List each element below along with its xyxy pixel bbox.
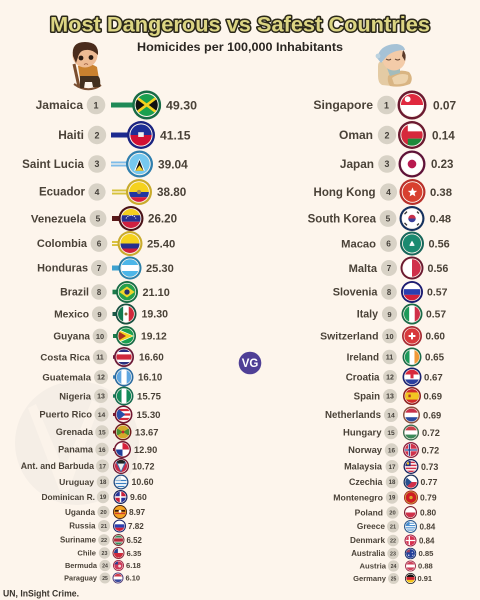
row: Suriname: 6.52 — [126, 536, 142, 545]
row: Montenegro — [333, 490, 437, 504]
row: Nigeria: 15.75 — [137, 391, 162, 402]
row: Uruguay: 10.60 — [132, 477, 154, 487]
row: Guyana: Guyana — [53, 332, 90, 342]
row: Slovenia: Slovenia — [333, 287, 378, 299]
row: Croatia: 12 — [386, 375, 394, 382]
row: Hong Kong: 0.38 — [430, 187, 452, 199]
row: Norway: Norway — [348, 444, 383, 455]
row: Montenegro: Montenegro — [333, 492, 383, 502]
row: Spain: 13 — [386, 394, 394, 400]
row: Panama: 16 — [98, 447, 106, 454]
row: Denmark: 22 — [390, 538, 396, 544]
title: Most Dangerous vs Safest Countries — [50, 14, 430, 36]
row: Guatemala — [42, 368, 162, 386]
row: Australia: 23 — [390, 551, 396, 557]
row: Netherlands: 0.69 — [423, 410, 441, 420]
row: Czechia — [349, 474, 438, 490]
row: Ireland: 0.65 — [425, 352, 445, 363]
row: Chile: Chile — [77, 549, 96, 558]
row: Dominican Republic: 9.60 — [130, 492, 147, 502]
row: Japan: 0.23 — [431, 159, 453, 171]
watermark logo — [15, 381, 139, 505]
VG logo badge — [239, 352, 261, 374]
row: Croatia — [346, 368, 443, 386]
row: Venezuela: 26.20 — [148, 212, 177, 226]
row: Austria: 0.88 — [418, 562, 433, 571]
row: Guatemala: 12 — [97, 375, 105, 382]
row: Haiti: 2 — [94, 130, 100, 140]
row: Macao: 6 — [386, 239, 391, 249]
row: Australia: 0.85 — [418, 549, 434, 558]
row: Panama: 12.90 — [134, 445, 157, 455]
row: Malta: Malta — [349, 263, 378, 275]
row: Greece: 0.84 — [420, 522, 436, 531]
row: Germany: Germany — [353, 574, 387, 583]
row: Norway — [348, 442, 439, 458]
row: Honduras: Honduras — [37, 262, 88, 274]
row: Switzerland: Switzerland — [320, 331, 378, 343]
row: Uganda: 20 — [100, 510, 107, 516]
row: Slovenia: 8 — [387, 288, 392, 297]
row: Haiti: Haiti — [58, 128, 84, 142]
row: Austria: Austria — [360, 562, 387, 571]
row: Venezuela: Venezuela — [31, 214, 87, 226]
row: Paraguay: Paraguay — [64, 574, 98, 582]
row: Germany — [353, 573, 432, 584]
row: Saint Lucia: Saint Lucia — [22, 158, 85, 171]
row: Italy: 9 — [387, 310, 392, 319]
row: Russia: Russia — [69, 522, 96, 531]
row: Paraguay: 25 — [102, 576, 108, 582]
row: Nigeria: Nigeria — [59, 390, 92, 401]
row: Australia: Australia — [351, 549, 386, 558]
row: South Korea: 0.48 — [430, 214, 451, 226]
row: Ecuador — [39, 179, 187, 205]
row: Mexico: 9 — [97, 310, 102, 319]
row: Slovenia: 0.57 — [427, 287, 448, 299]
row: South Korea — [308, 206, 451, 231]
row: Chile: 23 — [102, 551, 107, 557]
row: Mexico: 19.30 — [142, 309, 168, 321]
row: Russia: 7.82 — [128, 522, 144, 531]
row: Japan: 3 — [385, 159, 390, 169]
row: Panama — [58, 441, 157, 458]
row: Uruguay: 18 — [100, 479, 107, 486]
row: Dominican Republic — [41, 490, 147, 504]
row: Spain — [354, 387, 442, 405]
row: Antigua and Barbuda: Ant. and Barbuda — [21, 461, 94, 471]
row: Malaysia: 0.73 — [421, 462, 438, 472]
row: Macao: Macao — [341, 238, 376, 250]
row: Austria: 24 — [391, 564, 396, 570]
row: Ecuador: Ecuador — [39, 186, 86, 198]
row: Poland: 0.80 — [420, 507, 437, 517]
row: Macao: 0.56 — [428, 238, 450, 250]
row: Singapore — [313, 90, 457, 120]
row: Spain: 0.69 — [424, 391, 442, 402]
row: Grenada — [56, 424, 158, 440]
row: Greece — [357, 520, 436, 533]
row: Grenada: 15 — [98, 429, 106, 436]
row: Japan: Japan — [340, 157, 374, 171]
icon: worried man in rocking chair — [72, 42, 101, 89]
row: Netherlands: Netherlands — [325, 410, 381, 421]
row: Hungary: 0.72 — [422, 428, 440, 438]
row: Saint Lucia: 39.04 — [158, 157, 188, 171]
row: Paraguay: 6.10 — [126, 574, 140, 583]
row: Chile — [77, 547, 142, 559]
row: Slovenia — [333, 281, 448, 303]
row: Austria — [360, 560, 433, 572]
row: Malta: 0.56 — [428, 263, 448, 275]
row: Oman: 0.14 — [432, 129, 455, 142]
row: Venezuela: 5 — [96, 214, 101, 224]
row: Hungary: 15 — [387, 430, 395, 437]
row: Greece: Greece — [357, 521, 385, 531]
row: Croatia: 0.67 — [424, 372, 443, 383]
row: Oman: Oman — [339, 128, 373, 142]
source note: UN, InSight Crime. — [3, 588, 79, 598]
row: Netherlands: 14 — [387, 412, 395, 420]
row: Suriname: Suriname — [60, 536, 97, 545]
row: Brazil — [60, 281, 170, 303]
row: Bermuda — [65, 560, 141, 571]
row: Bermuda: 24 — [102, 563, 108, 569]
row: Antigua and Barbuda: 10.72 — [132, 461, 155, 471]
row: Germany: 0.91 — [418, 574, 432, 583]
row: Suriname: 22 — [101, 538, 107, 544]
row: Suriname — [60, 534, 142, 546]
row: Greece: 21 — [390, 524, 396, 530]
row: South Korea: 5 — [386, 214, 391, 224]
row: Uganda — [65, 505, 146, 519]
row: Bermuda: Bermuda — [65, 561, 98, 570]
row: Oman: 2 — [384, 130, 390, 140]
row: Guatemala: Guatemala — [42, 372, 92, 383]
row: Venezuela — [31, 206, 177, 231]
row: Colombia: 25.40 — [147, 238, 175, 250]
row: Poland — [355, 506, 437, 519]
row: Denmark — [350, 534, 435, 546]
row: Croatia: Croatia — [346, 372, 380, 383]
row: Brazil: Brazil — [60, 286, 89, 298]
row: Ireland — [347, 348, 445, 366]
row: Uruguay: Uruguay — [59, 477, 94, 487]
row: Mexico: Mexico — [54, 310, 89, 320]
row: Chile: 6.35 — [126, 549, 142, 558]
row: Spain: Spain — [354, 391, 380, 402]
row: Puerto Rico — [39, 406, 161, 424]
row: Uruguay — [59, 474, 154, 490]
row: Puerto Rico: Puerto Rico — [39, 408, 92, 420]
row: Jamaica — [36, 90, 197, 120]
row: Singapore: Singapore — [313, 98, 373, 112]
row: Colombia: 6 — [97, 239, 102, 249]
row: Honduras — [37, 256, 174, 280]
row: Singapore: 0.07 — [433, 98, 457, 112]
row: Brazil: 8 — [97, 288, 102, 297]
left column: most dangerous — [21, 90, 197, 584]
row: Switzerland: 0.60 — [426, 332, 445, 342]
row: Russia: 21 — [101, 524, 107, 530]
row: Grenada: 13.67 — [135, 426, 158, 438]
row: Hong Kong — [314, 179, 452, 205]
row: Antigua and Barbuda — [21, 458, 155, 474]
row: Malta — [349, 256, 448, 280]
row: Uganda: 8.97 — [129, 507, 146, 517]
row: Hong Kong: 4 — [386, 187, 391, 197]
row: Czechia: 18 — [389, 479, 396, 486]
row: Malaysia: 17 — [388, 464, 396, 471]
row: Malaysia — [344, 459, 438, 474]
row: Dominican Republic: 19 — [100, 495, 107, 501]
row: Ecuador: 4 — [95, 187, 100, 197]
row: Denmark: 0.84 — [419, 536, 435, 545]
row: Switzerland — [320, 326, 445, 346]
row: Dominican Republic: Dominican R. — [41, 492, 95, 502]
row: Costa Rica: Costa Rica — [40, 352, 91, 363]
row: Bermuda: 6.18 — [126, 561, 141, 570]
row: Grenada: Grenada — [56, 427, 94, 437]
row: Ecuador: 38.80 — [157, 186, 187, 199]
row: Macao — [341, 232, 450, 256]
row: Honduras: 25.30 — [146, 263, 174, 275]
icon: sleeping boy in bed — [376, 44, 412, 87]
row: Mexico — [54, 304, 168, 324]
row: Switzerland: 10 — [385, 332, 394, 341]
row: Japan — [340, 150, 453, 178]
row: Colombia: Colombia — [37, 238, 88, 250]
VG logo badge: VG — [242, 358, 258, 370]
row: Colombia — [37, 231, 175, 256]
row: Puerto Rico: 14 — [98, 412, 105, 419]
row: Guyana: 19.12 — [141, 332, 167, 343]
row: Costa Rica: 11 — [96, 353, 104, 362]
row: Singapore: 1 — [384, 100, 389, 110]
row: Guatemala: 16.10 — [138, 372, 162, 383]
row: Jamaica: Jamaica — [36, 98, 83, 112]
row: Czechia: 0.77 — [420, 477, 438, 487]
row: Hong Kong: Hong Kong — [314, 187, 376, 199]
row: Poland: Poland — [355, 507, 383, 517]
row: Oman — [339, 121, 455, 149]
row: Hungary — [343, 424, 440, 440]
row: Germany: 25 — [391, 576, 396, 582]
row: Denmark: Denmark — [350, 536, 385, 545]
row: Malta: 7 — [387, 264, 392, 273]
row: Costa Rica — [40, 347, 164, 367]
row: Italy: Italy — [357, 309, 378, 321]
row: Norway: 0.72 — [422, 445, 439, 455]
row: Russia — [69, 520, 144, 532]
row: Poland: 20 — [389, 511, 396, 517]
row: Nigeria — [59, 386, 162, 406]
row: Nigeria: 13 — [97, 394, 105, 400]
row: Ireland: 11 — [386, 353, 393, 362]
row: Montenegro: 0.79 — [420, 492, 437, 502]
row: Haiti — [58, 121, 191, 149]
subtitle: Homicides per 100,000 Inhabitants — [137, 40, 343, 54]
right column: safest — [308, 90, 457, 584]
row: Malaysia: Malaysia — [344, 462, 383, 472]
row: Netherlands — [325, 406, 441, 424]
row: Antigua and Barbuda: 17 — [99, 463, 106, 470]
row: Italy: 0.57 — [426, 310, 446, 321]
row: Saint Lucia: 3 — [95, 159, 100, 169]
row: Hungary: Hungary — [343, 428, 382, 439]
row: Costa Rica: 16.60 — [139, 352, 164, 364]
row: Jamaica: 1 — [93, 100, 99, 110]
row: Guyana — [53, 326, 167, 346]
row: Norway: 16 — [388, 447, 395, 454]
row: Puerto Rico: 15.30 — [136, 410, 161, 421]
row: Panama: Panama — [58, 445, 94, 455]
row: Guyana: 10 — [96, 332, 104, 341]
row: Ireland: Ireland — [347, 352, 379, 363]
row: Jamaica: 49.30 — [166, 98, 197, 112]
row: Paraguay — [64, 572, 140, 584]
row: Australia — [351, 548, 434, 559]
row: Saint Lucia — [22, 150, 188, 178]
row: Haiti: 41.15 — [160, 128, 191, 142]
row: Czechia: Czechia — [349, 477, 383, 487]
row: Brazil: 21.10 — [142, 287, 170, 299]
row: Italy — [357, 304, 446, 324]
row: Uganda: Uganda — [65, 508, 95, 517]
row: Honduras: 7 — [97, 264, 102, 273]
row: South Korea: South Korea — [308, 214, 377, 226]
row: Montenegro: 19 — [389, 496, 396, 502]
